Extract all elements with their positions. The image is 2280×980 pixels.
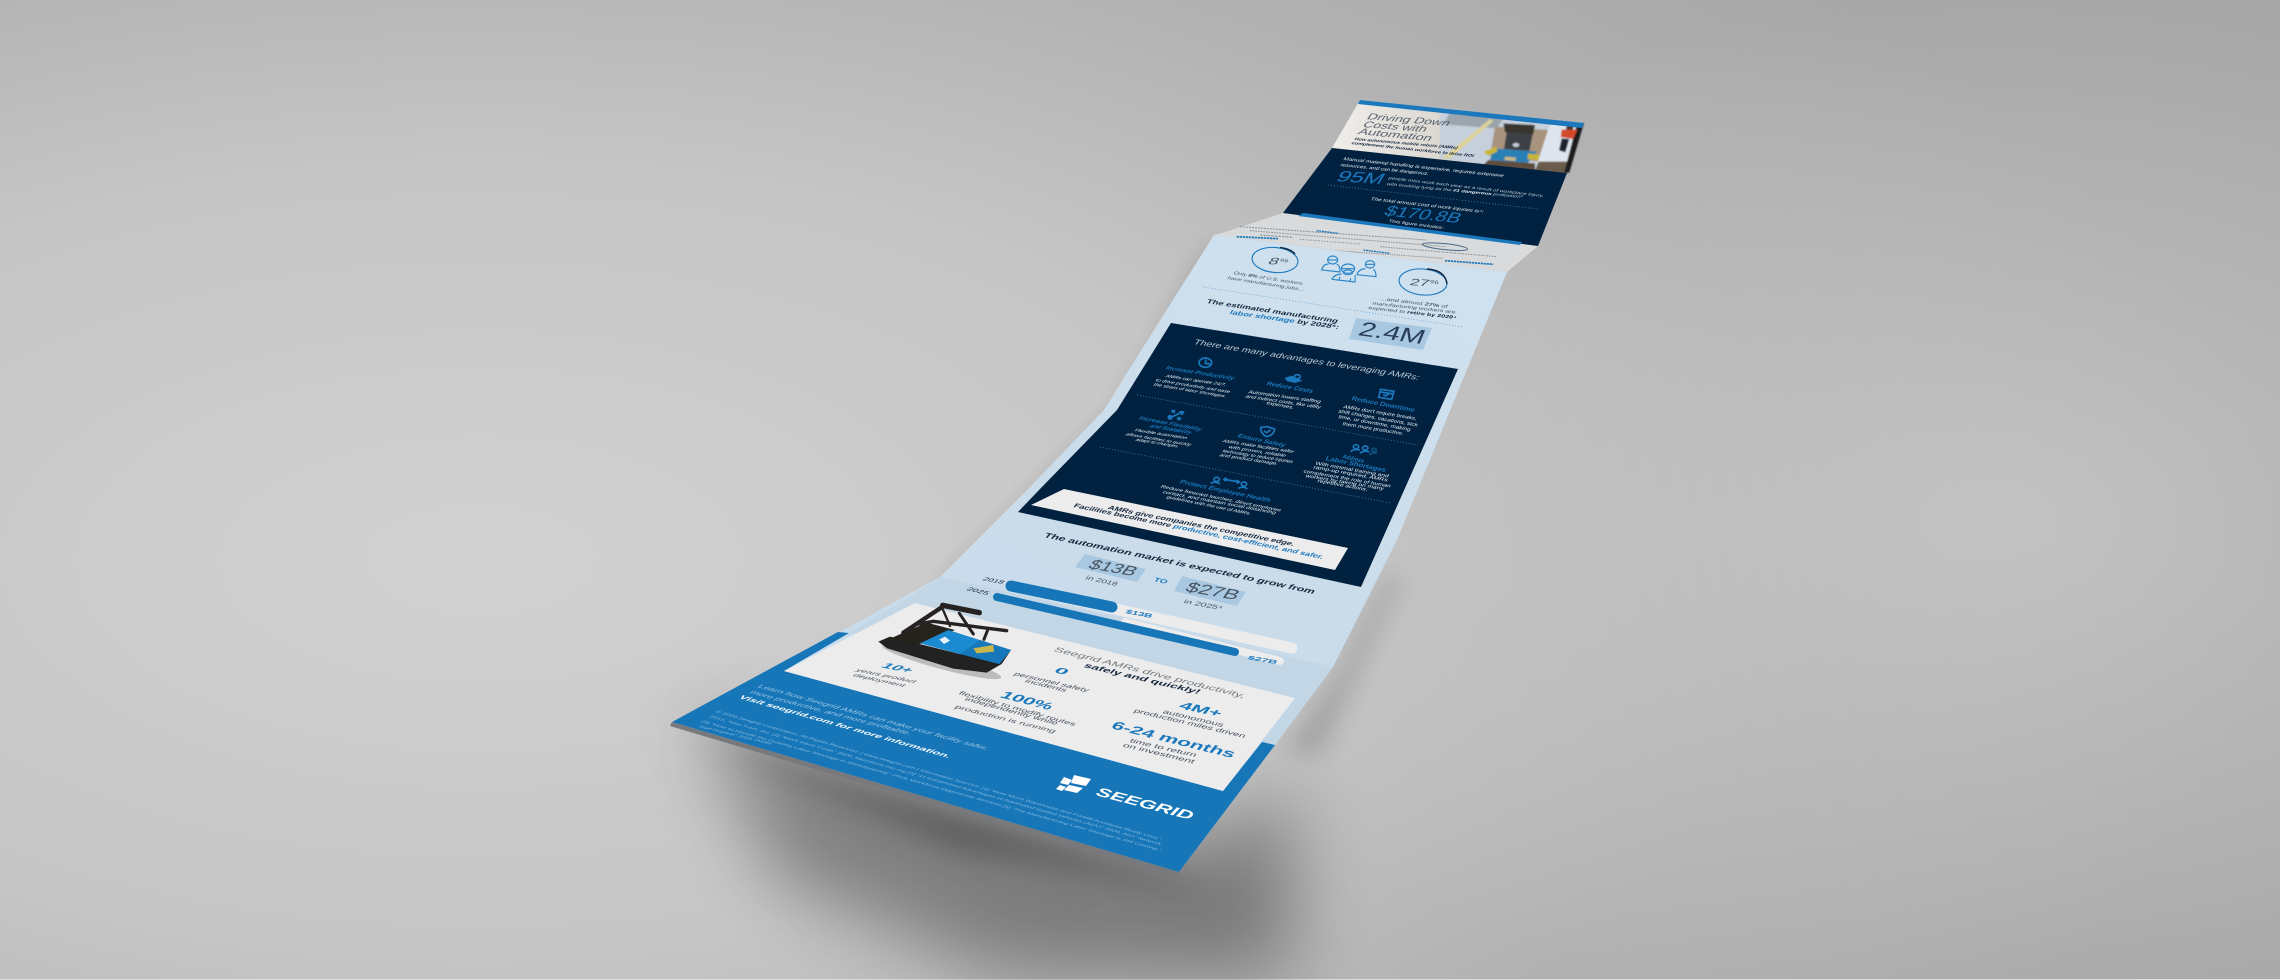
stat: route flexibility: flexibility to modify routes (957, 690, 1079, 727)
item: reduce downtime: Reduce Downtime (1350, 396, 1416, 414)
stat: route flexibility: 100% (996, 690, 1056, 713)
stat: 95M (1333, 168, 1545, 199)
item: address labor shortages: With minimal training and (1314, 460, 1391, 479)
item: reduce downtime: AMRs don't require breaks, (1343, 404, 1418, 421)
item: increase productivity: Increase Productivity (1163, 366, 1237, 382)
stat: annual cost: This figure includes: (1387, 219, 1445, 230)
stat: 8 percent (1226, 246, 1305, 292)
stat: safety incidents: 0 (1051, 666, 1072, 677)
icon: hand with coin (1286, 375, 1300, 382)
item: address labor shortages (1303, 453, 1392, 492)
item: reduce costs: expenses. (1265, 401, 1295, 410)
stat box: 27B: $27B (1182, 579, 1244, 603)
item: reduce costs: Automation lowers staffing (1247, 389, 1323, 404)
item: address labor shortages: repetitive actions. (1316, 478, 1369, 492)
item: increase productivity: AMRs can operate 24/7, (1164, 374, 1228, 387)
item: address labor shortages: complement the role of human (1303, 469, 1392, 489)
stat: 95M: with trucking tying as the #1 dangerous profession³ (1385, 182, 1524, 199)
item: reduce downtime: them more productive. (1341, 421, 1405, 436)
stat: return on investment: on investment (1121, 743, 1197, 765)
stat: 27 percent: expected to retire by 2029⁴ (1368, 305, 1458, 320)
item: address labor shortages: Labor Shortages (1324, 456, 1387, 474)
stat: 27 percent: % (1429, 279, 1440, 286)
panel: cost of injuries (navy) (1283, 148, 1567, 246)
item: protect employee health: guidelines with the use of AMRs. (1165, 495, 1253, 516)
item: flexibility and scalability: and Scalability (1147, 424, 1194, 436)
bar chart: market size (964, 576, 1292, 665)
stat: 27 percent (1368, 267, 1458, 320)
item: ensure safety: with proven, reliable (1227, 444, 1289, 458)
panel: AMR advantages (1018, 323, 1458, 587)
item: reduce downtime: shift changes, vacations, sick (1338, 409, 1420, 428)
item: ensure safety (1218, 433, 1297, 466)
item: reduce downtime: time, or downtime, making (1338, 414, 1413, 432)
stat: years deployment: 10+ (878, 661, 918, 674)
stat: return on investment: 6-24 months (1108, 720, 1239, 761)
heading: There are many advantages to leveraging AMRs: (1192, 338, 1422, 382)
title: Automation (1356, 127, 1435, 143)
icon: shield (1261, 427, 1275, 437)
gray folded strip (1212, 213, 1538, 277)
item: address labor shortages: workers by taking on many (1304, 473, 1386, 491)
item: flexibility and scalability: Increase Flexibility (1136, 416, 1205, 433)
bar chart: market size: $27B (1246, 654, 1279, 665)
stat: years deployment: deployment (850, 673, 908, 688)
bar chart: market size: 2018 (980, 576, 1007, 586)
icon: clock (1199, 358, 1212, 367)
lower fold tone (849, 577, 1333, 745)
heading: safely and quickly! (1082, 662, 1203, 695)
panel: seegrid blue footer (670, 632, 1275, 877)
stat box: 13B (1075, 554, 1146, 588)
text: call to action (736, 683, 992, 759)
stat box: 2.4M: 2.4M (1355, 318, 1429, 348)
text: sources (697, 710, 1163, 852)
subtitle: How autonomous mobile robots (AMRs) (1353, 137, 1460, 150)
item: protect employee health: contact, and maintain social distancing (1161, 490, 1277, 515)
item: ensure safety: and product damage. (1218, 452, 1280, 466)
callout: competitive edge (1031, 489, 1348, 570)
title: Driving Down (1364, 112, 1453, 129)
stat box: 2.4M (1349, 318, 1432, 350)
stat: route flexibility: independently while (963, 697, 1060, 727)
stat: route flexibility (953, 690, 1079, 734)
item: flexibility and scalability (1124, 416, 1205, 448)
text: sources: Staff Preparer" 2020, IAMfer. (697, 725, 776, 746)
item: increase productivity: to drive productivity and ease (1154, 378, 1233, 394)
logo text: SEEGRID (1094, 784, 1196, 823)
icon: flexibility arrows (1168, 410, 1183, 420)
text: call to action: Learn how Seegrid AMRs can make your facility safer, (756, 683, 992, 751)
item: flexibility and scalability: allows facilities to quickly (1124, 432, 1195, 447)
icon: distancing workers (1211, 477, 1247, 489)
text: material handling intro: resources, and can be dangerous. (1339, 162, 1430, 176)
item: increase productivity (1152, 366, 1237, 398)
stat: safety incidents: personnel safety (1011, 671, 1093, 694)
icon: workers group (1351, 445, 1377, 455)
stat: return on investment: time to return (1128, 738, 1198, 759)
callout: competitive edge: Facilities become more productive, cost-efficient, and safer. (1072, 502, 1326, 560)
item: flexibility and scalability: Flexible automation (1133, 428, 1190, 440)
text: call to action: Visit seegrid.com for more information. (736, 694, 954, 759)
stat box: 27B: in 2025⁴ (1182, 599, 1224, 612)
panel: header (1332, 100, 1584, 174)
icon: three workers (1322, 256, 1376, 282)
stat box: 13B: in 2018 (1083, 575, 1120, 588)
stat: labor shortage heading: The estimated manufacturing (1205, 298, 1340, 325)
stat box: 27B (1174, 576, 1246, 612)
icon: seegrid logo mark (1056, 775, 1091, 793)
icon: calendar (1379, 389, 1394, 399)
subtitle: complement the human workforce to drive ROI (1350, 141, 1476, 159)
item: increase productivity: the strain of labor shortages. (1152, 382, 1228, 398)
item: ensure safety: technology to reduce injuries (1221, 448, 1295, 464)
icons (1168, 358, 1394, 489)
stat: annual cost: $170.8B (1381, 204, 1465, 227)
stat: labor shortage heading: labor shortage by 2028⁵: (1228, 310, 1340, 331)
item: ensure safety: Ensure Safety (1235, 433, 1287, 449)
stat box: 13B: $13B (1085, 557, 1142, 579)
heading: The automation market is expected to grow from (1042, 531, 1318, 595)
image: AMR robot (878, 605, 1011, 685)
text: call to action: more productive, and more profitable. (747, 690, 914, 736)
stat: 95M: 95M (1333, 168, 1389, 187)
text: material handling intro (1339, 157, 1505, 178)
item: reduce costs: and indirect costs, like utility (1244, 394, 1324, 410)
stat: 8 percent: Only 8% of U.S. workers (1232, 270, 1304, 286)
stat: safety incidents: incidents (1022, 679, 1070, 694)
item: flexibility and scalability: adapt to changes. (1134, 438, 1181, 448)
stat: 27 percent: 27 (1408, 276, 1416, 288)
stat: production miles: autonomous (1161, 709, 1225, 729)
item: protect employee health: Protect Employee Health (1178, 479, 1273, 504)
section: automation market growth (964, 531, 1318, 665)
callout: competitive edge: AMRs give companies the competitive edge. (1106, 504, 1297, 548)
heading: Seegrid AMRs drive productivity, (1052, 646, 1248, 699)
top blue strip (1358, 100, 1584, 128)
item: reduce costs (1244, 381, 1324, 410)
stat: years deployment (850, 661, 919, 688)
stat: return on investment (1108, 720, 1239, 765)
text: material handling intro: Manual material handling is expensive, requires extensive (1342, 157, 1505, 178)
stat: production miles: 4M+ (1176, 700, 1225, 719)
stat: 8 percent: 8 (1266, 256, 1273, 266)
panel: seegrid stats (784, 603, 1295, 791)
item: reduce downtime (1338, 396, 1420, 436)
item: reduce costs: Reduce Costs (1265, 381, 1315, 395)
item: address labor shortages: ramp-up required, AMRs (1312, 464, 1390, 483)
stat: 8 percent: % (1278, 257, 1291, 264)
connector: to: TO (1152, 577, 1170, 585)
photo: warehouse with AMR (1440, 108, 1584, 174)
item: ensure safety: AMRs make facilities safer (1221, 438, 1297, 454)
stat: 8 percent: have manufacturing jobs... (1226, 275, 1305, 292)
item: protect employee health: Reduce forecast touches, direct employee (1159, 485, 1282, 513)
stat: years deployment: years product (853, 668, 919, 684)
title (1356, 112, 1453, 143)
item: protect employee health (1159, 479, 1282, 516)
folded flyer (670, 100, 1584, 877)
bar chart: market size: 2025 (964, 586, 992, 597)
title: Costs with (1361, 119, 1431, 134)
stat: production miles (1132, 700, 1248, 739)
stat: annual cost: The total annual cost of work injuries is⁴: (1369, 197, 1485, 215)
panel: light blue body (672, 235, 1507, 872)
flyer drop shadow (680, 245, 1400, 975)
stat: route flexibility: production is running (953, 705, 1058, 734)
stat: 27 percent: manufacturing workers are (1372, 300, 1458, 315)
stat: 27 percent: ...and almost 27% of (1380, 296, 1451, 309)
stat: safety incidents (1011, 666, 1093, 694)
item: address labor shortages: Address (1341, 453, 1366, 464)
stat: annual cost (1369, 197, 1485, 230)
stat: production miles: production miles driven (1132, 707, 1248, 739)
bar chart: market size: $13B (1124, 608, 1155, 619)
stat: 95M: people miss work each year as a result of workplace injury, (1387, 176, 1545, 198)
